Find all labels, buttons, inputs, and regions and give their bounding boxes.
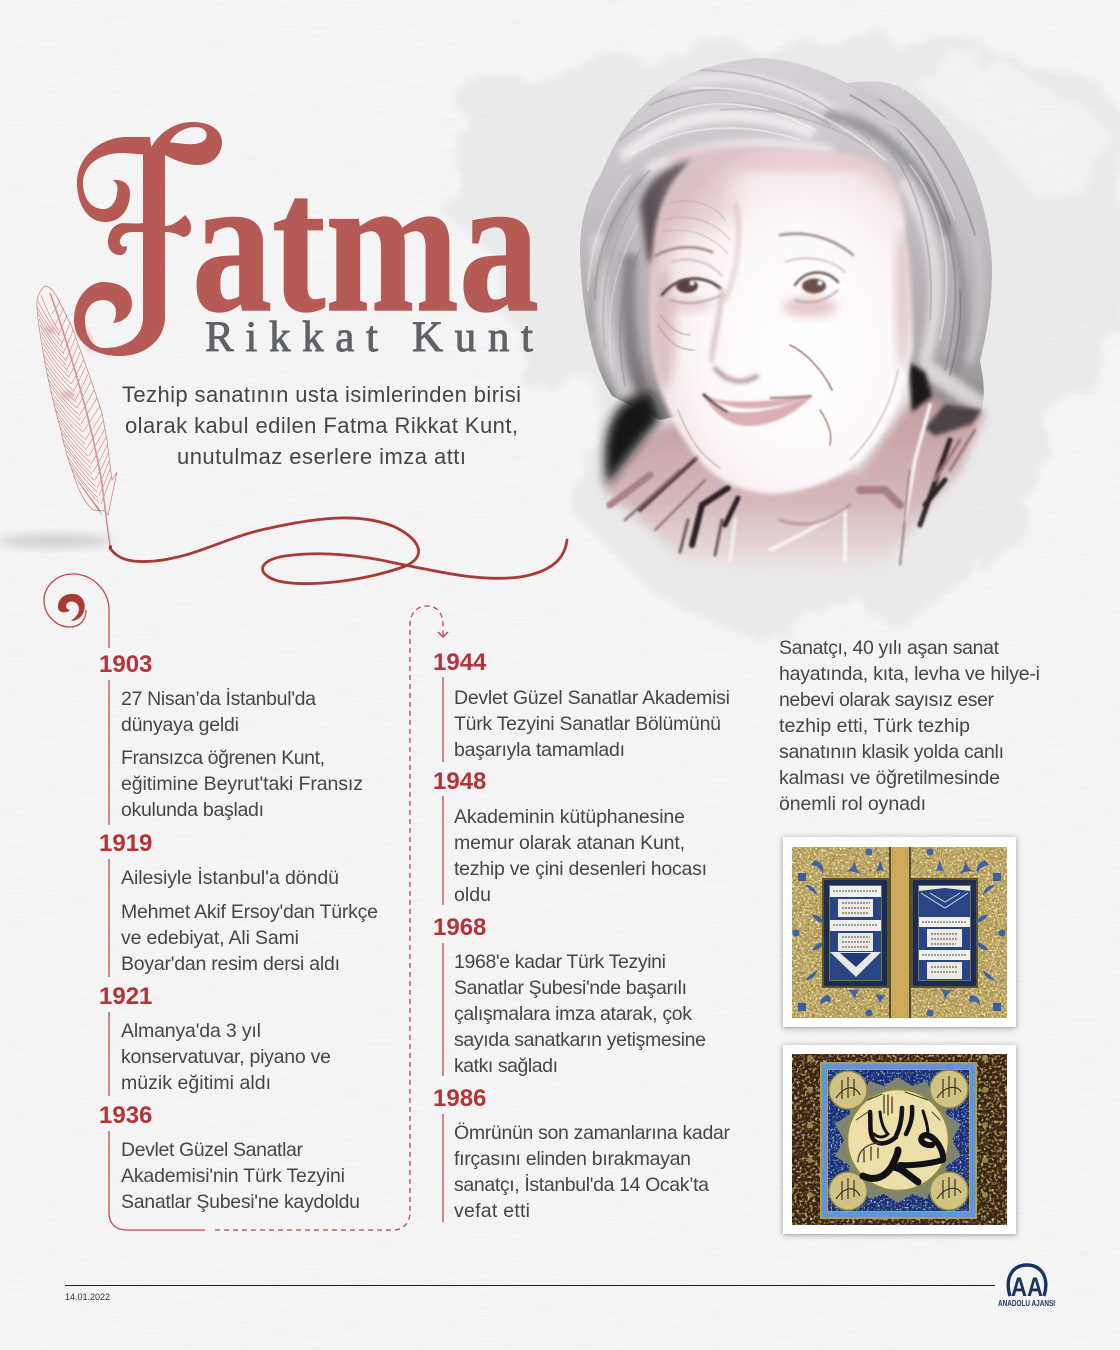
intro text xyxy=(122,382,521,469)
Anadolu Ajansi logo: ANADOLU AJANSI xyxy=(998,1298,1055,1308)
forehead crease xyxy=(725,205,739,300)
footer rule xyxy=(65,1284,995,1286)
text 1944: Devlet Güzel Sanatlar Akademisi xyxy=(454,687,730,709)
portrait: shawl and collar xyxy=(603,362,985,575)
text 1903: okulunda başladı xyxy=(121,799,264,821)
year 1919: 1919 xyxy=(99,830,152,857)
mouth xyxy=(703,394,812,426)
text 1948 xyxy=(454,806,707,906)
year 1944: 1944 xyxy=(433,649,487,676)
text 1948: tezhip ve çini desenleri hocası xyxy=(454,858,707,880)
star medallion xyxy=(835,1077,961,1203)
side paragraph: sanatının klasik yolda canlı xyxy=(779,741,1004,763)
year 1921: 1921 xyxy=(99,983,152,1010)
text 1986 xyxy=(454,1122,730,1222)
side paragraph: hayatında, kıta, levha ve hilye-i xyxy=(779,663,1040,685)
text 1921: müzik eğitimi aldı xyxy=(121,1072,271,1094)
text 1986: fırçasını elinden bırakmayan xyxy=(454,1148,691,1170)
text 1944 xyxy=(454,687,730,761)
text 1919: Ailesiyle İstanbul'a döndü xyxy=(121,866,339,889)
text 1919: Boyar'dan resim dersi aldı xyxy=(121,953,340,975)
text 1968: Sanatlar Şubesi'nde başarılı xyxy=(454,977,687,999)
text 1921 xyxy=(121,1020,331,1094)
eyeballs xyxy=(676,278,826,294)
arrow head xyxy=(438,632,448,637)
feather xyxy=(37,286,117,549)
eyelids xyxy=(662,258,845,303)
text 1936 xyxy=(121,1139,360,1213)
text 1919: Mehmet Akif Ersoy'dan Türkçe xyxy=(121,901,378,923)
title: Fatma xyxy=(74,98,539,387)
text 1921: konservatuvar, piyano ve xyxy=(121,1046,331,1068)
text 1903: eğitimine Beyrut'taki Fransız xyxy=(121,773,363,795)
eyebrows xyxy=(655,234,853,256)
text 1903: Fransızca öğrenen Kunt, xyxy=(121,747,325,769)
border medallions xyxy=(807,1055,988,1198)
Anadolu Ajansi logo xyxy=(998,1265,1055,1308)
Anadolu Ajansi logo: AA xyxy=(1011,1272,1043,1302)
left text panel xyxy=(823,879,888,987)
subtitle: Rikkat Kunt: Rikkat Kunt xyxy=(205,314,533,361)
year 1948: 1948 xyxy=(433,768,486,795)
text 1968 xyxy=(454,951,706,1077)
text 1903: dünyaya geldi xyxy=(121,714,239,736)
portrait: hair xyxy=(575,55,995,425)
corner calligraphy xyxy=(836,1076,961,1200)
text 1968: katkı sağladı xyxy=(454,1055,558,1077)
feather shading xyxy=(44,326,96,399)
artwork card: hilye calligraphy xyxy=(783,1045,1016,1234)
intro text: unutulmaz eserlere imza attı xyxy=(177,444,466,469)
text 1948: Akademinin kütüphanesine xyxy=(454,806,685,828)
text 1968: 1968'e kadar Türk Tezyini xyxy=(454,951,666,973)
year 1968: 1968 xyxy=(433,914,486,941)
feather quill xyxy=(50,293,110,547)
pen flourish xyxy=(110,518,567,584)
title letter F stem: F xyxy=(115,98,243,387)
year 1936: 1936 xyxy=(99,1102,152,1129)
intro text: olarak kabul edilen Fatma Rikkat Kunt, xyxy=(125,413,518,438)
nose xyxy=(712,290,757,381)
side paragraph: önemli rol oynadı xyxy=(779,793,926,815)
central roundel xyxy=(847,1089,949,1191)
text 1919: ve edebiyat, Ali Sami xyxy=(121,927,299,949)
text 1903: 27 Nisan’da İstanbul'da xyxy=(121,687,316,710)
text 1986: sanatçı, İstanbul'da 14 Ocak’ta xyxy=(454,1173,709,1196)
right text panel xyxy=(912,879,977,987)
text 1968: sayıda sanatkarın yetişmesine xyxy=(454,1029,706,1051)
text 1944: Türk Tezyini Sanatlar Bölümünü xyxy=(454,713,721,735)
title letters atma: atma xyxy=(192,134,539,353)
side paragraph: Sanatçı, 40 yılı aşan sanat xyxy=(779,637,1000,659)
text 1948: oldu xyxy=(454,884,491,906)
side paragraph xyxy=(779,637,1040,815)
date: 14.01.2022 xyxy=(65,1292,110,1302)
text 1936: Sanatlar Şubesi'ne kaydoldu xyxy=(121,1191,360,1213)
text 1968: çalışmalara imza atarak, çok xyxy=(454,1003,692,1025)
central calligraphy xyxy=(856,1092,943,1182)
F swashes xyxy=(74,122,222,356)
text 1986: vefat etti xyxy=(454,1200,530,1222)
timeline column 2 xyxy=(433,649,730,1222)
spiral ornament xyxy=(44,574,109,648)
timeline column 1 xyxy=(99,651,378,1213)
timeline connector xyxy=(44,574,448,1230)
text 1921: Almanya'da 3 yıl xyxy=(121,1020,261,1042)
hair shadow by forehead xyxy=(640,160,690,262)
intro text: Tezhip sanatının usta isimlerinden birisi xyxy=(122,382,521,407)
side paragraph: nebevi olarak sayısız eser xyxy=(779,689,994,711)
text 1936: Devlet Güzel Sanatlar xyxy=(121,1139,304,1161)
text 1903 xyxy=(121,687,363,821)
year 1986: 1986 xyxy=(433,1085,486,1112)
blue ornaments xyxy=(792,848,1006,1016)
side paragraph: kalması ve öğretilmesinde xyxy=(779,767,1000,789)
artwork card: illuminated manuscript xyxy=(783,837,1016,1027)
text 1948: memur olarak atanan Kunt, xyxy=(454,832,685,854)
arabesque lines xyxy=(796,850,1002,1015)
text 1944: başarıyla tamamladı xyxy=(454,739,625,761)
text 1936: Akademisi'nin Türk Tezyini xyxy=(121,1165,345,1187)
year 1903: 1903 xyxy=(99,651,152,678)
text 1986: Ömrünün son zamanlarına kadar xyxy=(454,1122,730,1144)
portrait of Fatma Rikkat Kunt xyxy=(575,55,995,575)
corner roundels xyxy=(829,1070,968,1210)
dashed path to second column xyxy=(215,606,443,1230)
text 1919 xyxy=(121,866,378,975)
side paragraph: tezhip etti, Türk tezhip xyxy=(779,715,970,737)
wrinkles xyxy=(658,201,898,468)
portrait: face xyxy=(649,150,913,494)
